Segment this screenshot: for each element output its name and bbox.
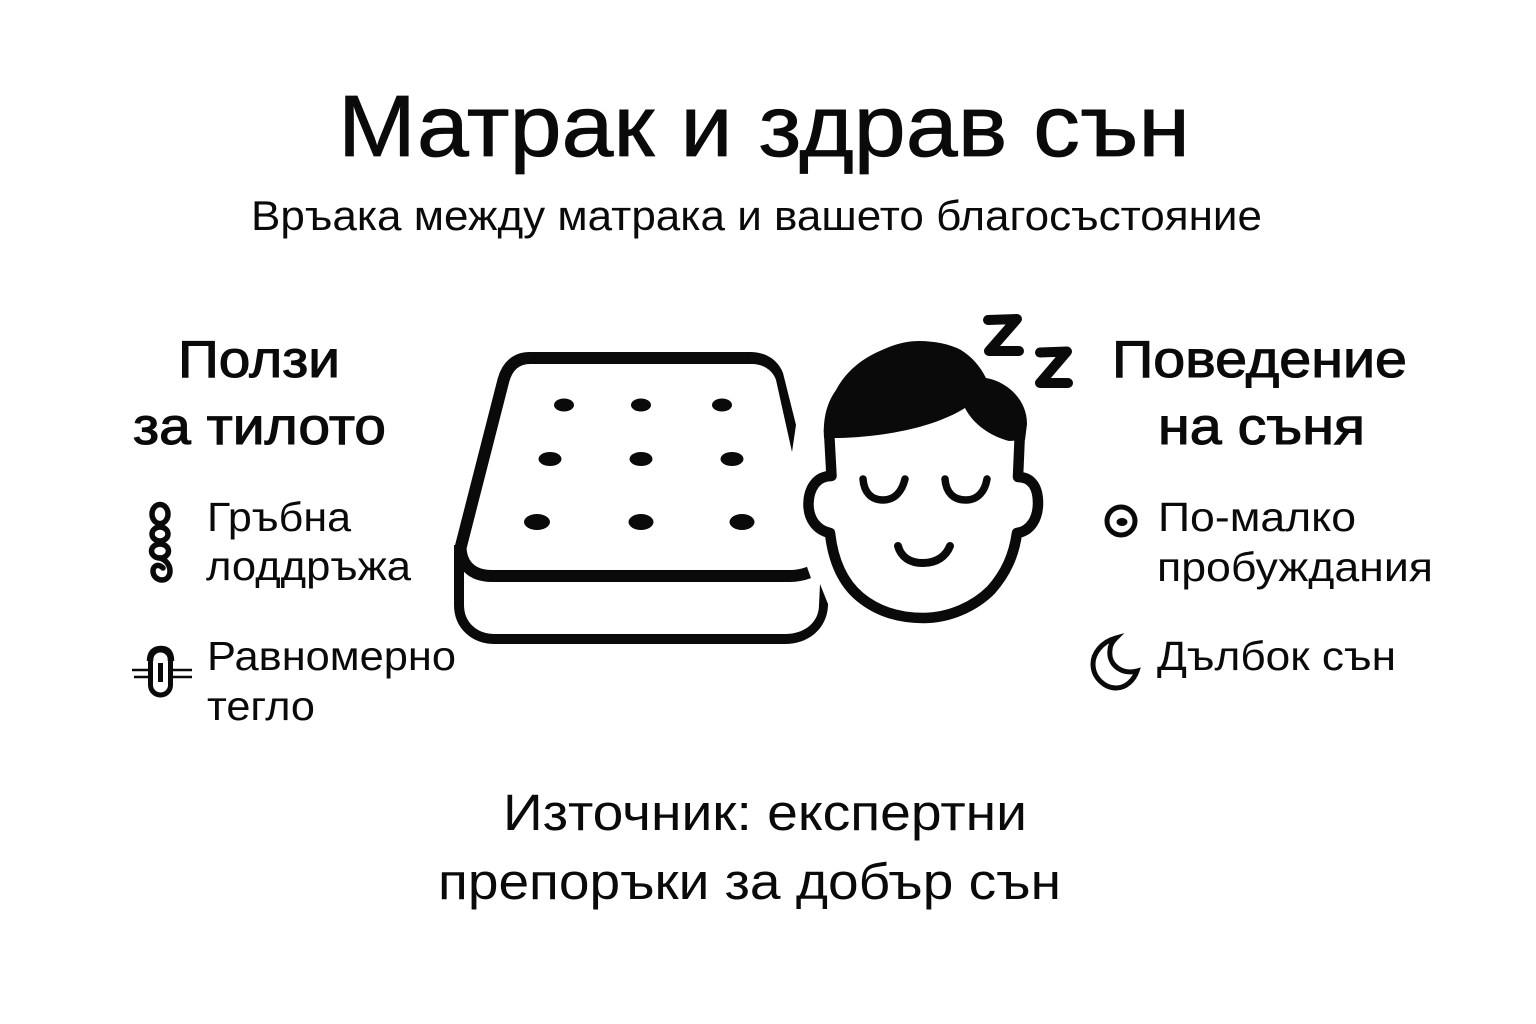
text: even weight: [207, 633, 456, 729]
mattress top: [460, 358, 750, 548]
text: back support: лоддръжа: [206, 543, 411, 589]
closed eyes: [863, 479, 987, 500]
hair: [824, 341, 1027, 441]
mattress dots: [524, 398, 754, 530]
heading: body benefits: [133, 331, 386, 456]
smile: [898, 546, 950, 563]
text: back support: Гръбна: [207, 494, 351, 540]
title: Матрак и здрав сън: [338, 78, 1190, 175]
heading: sleep behaviour: [1112, 331, 1407, 456]
source note: [438, 784, 1061, 910]
icon: zz: [988, 319, 1068, 383]
text: back support: [206, 494, 411, 589]
text: fewer awakenings: пробуждания: [1157, 544, 1433, 590]
illustration: mattress: [459, 352, 828, 644]
illustration: sleeping face: [808, 341, 1038, 618]
mattress right taper: [745, 352, 796, 452]
heading: sleep behaviour: Поведение: [1112, 331, 1407, 389]
source note: Източник: експертни: [503, 784, 1027, 841]
text: fewer awakenings: По-малко: [1158, 494, 1356, 540]
heading: body benefits: Ползи: [178, 331, 340, 389]
mattress top front edge: [460, 547, 809, 576]
mattress base: [459, 545, 786, 639]
source note: препоръки за добър сън: [438, 853, 1061, 910]
text: deep sleep: Дълбок сън: [1157, 633, 1396, 679]
icon: moon: [1093, 638, 1137, 688]
subtitle: Връака между матрака и вашето благосъстояние: [251, 192, 1262, 239]
mattress base right: [785, 584, 828, 644]
face outline: [808, 430, 1038, 618]
icon: eye: [1107, 507, 1135, 535]
icon: spine coil: [152, 504, 170, 580]
icon: even weight: [132, 649, 192, 695]
heading: body benefits: за тилото: [133, 398, 386, 456]
text: even weight: Равномерно: [207, 633, 456, 679]
text: fewer awakenings: [1157, 494, 1433, 590]
heading: sleep behaviour: на съня: [1158, 398, 1365, 456]
text: even weight: тегло: [207, 683, 315, 729]
